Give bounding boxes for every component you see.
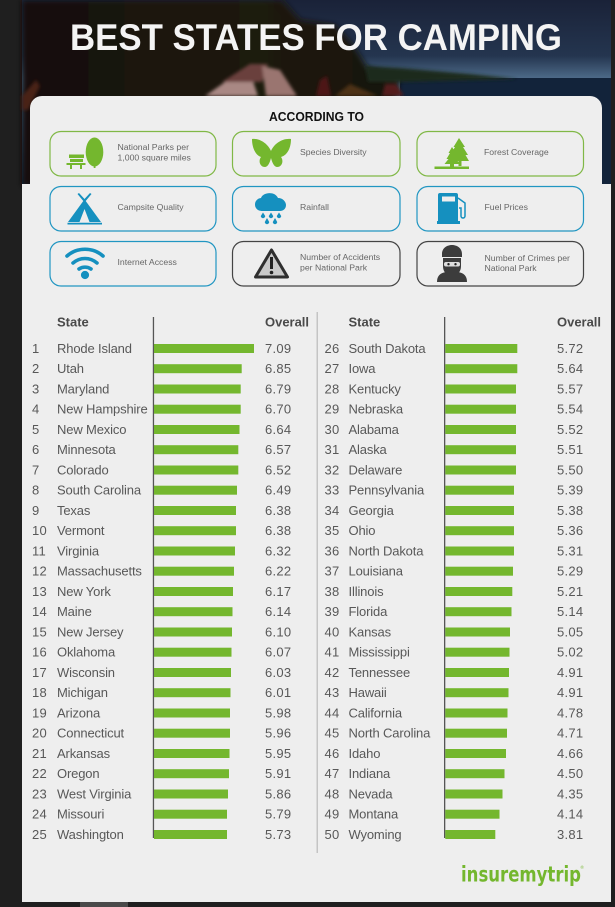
row 41: 5.02 [557, 645, 583, 660]
row 45: 4.71 [557, 726, 583, 741]
factor: accidents: Number of Accidents [300, 252, 381, 262]
row 26 [324, 341, 583, 356]
row 10: Vermont [57, 523, 105, 538]
row 44: 44 [324, 706, 339, 720]
logo: insuremytrip: ® [580, 864, 584, 870]
row 17: Wisconsin [57, 665, 115, 680]
row 48: 48 [324, 786, 339, 802]
row 23: 5.86 [265, 786, 291, 802]
ranking table: right column [324, 314, 601, 842]
row 4 [32, 402, 291, 417]
row 50: Wyoming [348, 827, 402, 842]
row 23: West Virginia [57, 786, 132, 802]
row 25 [32, 827, 291, 842]
row 2: Utah [57, 361, 84, 376]
row 15: 15 [32, 624, 47, 640]
column divider [316, 312, 318, 853]
row 47 [324, 766, 583, 781]
row 24: 24 [32, 807, 47, 822]
row 22: 22 [32, 766, 47, 781]
row 39 [324, 604, 583, 619]
row 22 [32, 766, 291, 781]
row 35: Ohio [348, 523, 375, 538]
icon: warning sign [256, 250, 288, 277]
row 18: Michigan [57, 685, 108, 700]
row 17 [32, 665, 291, 680]
row 49: Montana [348, 807, 399, 822]
factor: national parks: 1,000 square miles [118, 152, 192, 162]
row 8: South Carolina [57, 483, 142, 498]
factor: fuel prices [417, 186, 584, 231]
row 12 [32, 564, 291, 579]
row 49: 4.14 [557, 807, 583, 822]
row 33: 33 [324, 483, 339, 498]
axis line [444, 317, 445, 838]
icon: trees [434, 138, 469, 169]
header: overall: Overall [557, 314, 601, 330]
factor: national parks: National Parks per [118, 142, 189, 152]
row 43: 43 [324, 685, 339, 700]
row 28: 28 [324, 382, 339, 396]
row 25: Washington [57, 827, 124, 842]
header: state: State [348, 314, 380, 330]
row 3 [32, 382, 291, 396]
factor: species diversity: Species Diversity [300, 147, 367, 157]
row 44: California [348, 706, 403, 720]
row 40: 40 [324, 624, 339, 640]
row 28 [324, 382, 583, 396]
row 38: Illinois [348, 584, 384, 599]
row 32: Delaware [348, 462, 402, 478]
factor: rainfall: Rainfall [300, 202, 329, 212]
factor: species diversity [232, 132, 400, 176]
heading: according to: ACCORDING TO [269, 109, 364, 124]
row 17: 6.03 [265, 665, 291, 680]
row 13: 13 [32, 584, 47, 599]
row 7: 6.52 [265, 462, 291, 478]
row 35: 35 [324, 523, 339, 538]
row 6: 6 [32, 442, 39, 457]
row 8: 8 [32, 483, 39, 498]
factor: national parks [50, 132, 216, 176]
row 21: 5.95 [265, 746, 291, 761]
row 18 [32, 685, 291, 700]
factor: crimes [417, 242, 584, 286]
row 36: North Dakota [348, 544, 424, 558]
row 20: 5.96 [265, 726, 291, 741]
row 4: New Hampshire [57, 402, 148, 417]
row 8 [32, 483, 291, 498]
row 15: 6.10 [265, 624, 291, 640]
row 21: Arkansas [57, 746, 111, 761]
row 5: New Mexico [57, 422, 126, 437]
row 24: Missouri [57, 807, 104, 822]
row 14: 14 [32, 604, 47, 619]
row 43: 4.91 [557, 685, 583, 700]
ranking table: left column [32, 314, 309, 842]
row 49: 49 [324, 807, 339, 822]
row 30: 30 [324, 422, 339, 437]
row 33: 5.39 [557, 483, 583, 498]
row 37 [324, 564, 583, 579]
row 23: 23 [32, 786, 47, 802]
row 24: 5.79 [265, 807, 291, 822]
row 35: 5.36 [557, 523, 583, 538]
row 26: 5.72 [557, 341, 583, 356]
factor: forest coverage [417, 132, 584, 176]
row 31: Alaska [348, 442, 388, 457]
row 19: Arizona [57, 706, 101, 720]
title: BEST STATES FOR CAMPING [70, 17, 562, 58]
row 10 [32, 523, 291, 538]
icon: burglar [437, 245, 467, 282]
row 33: Pennsylvania [348, 483, 425, 498]
row 42: 4.91 [557, 665, 583, 680]
row 14 [32, 604, 291, 619]
row 18: 6.01 [265, 685, 291, 700]
row 34: 5.38 [557, 503, 583, 518]
row 46 [324, 746, 583, 761]
factor: crimes: Number of Crimes per [484, 253, 570, 263]
row 26: South Dakota [348, 341, 426, 356]
row 33 [324, 483, 583, 498]
logo: insuremytrip: insuremytrip [461, 862, 581, 886]
row 34: Georgia [348, 503, 395, 518]
row 27: Iowa [348, 361, 376, 376]
row 4: 4 [32, 402, 39, 417]
row 20: 20 [32, 726, 47, 741]
row 9: 9 [32, 503, 39, 518]
row 6 [32, 442, 291, 457]
icon: butterfly [252, 139, 291, 167]
row 11 [32, 544, 291, 558]
row 39: Florida [348, 604, 388, 619]
factor: fuel prices: Fuel Prices [484, 202, 529, 212]
row 5: 5 [32, 422, 39, 437]
row 9: 6.38 [265, 503, 291, 518]
row 41: Mississippi [348, 645, 410, 660]
row 34 [324, 503, 583, 518]
row 20 [32, 726, 291, 741]
row 12: 6.22 [265, 564, 291, 579]
row 11: 6.32 [265, 544, 291, 558]
icon: tent [68, 193, 102, 224]
row 30: 5.52 [557, 422, 583, 437]
row 28: Kentucky [348, 382, 401, 396]
row 50: 50 [324, 827, 339, 842]
row 1 [32, 341, 291, 356]
factor: forest coverage: Forest Coverage [484, 147, 549, 157]
row 30 [324, 422, 583, 437]
row 16: 16 [32, 645, 47, 660]
row 36 [324, 544, 583, 558]
factor: rainfall [232, 186, 400, 231]
row 27: 27 [324, 361, 339, 376]
row 45 [324, 726, 583, 741]
row 25: 5.73 [265, 827, 291, 842]
factor: campsite quality: Campsite Quality [118, 202, 184, 212]
row 41: 41 [324, 645, 339, 660]
row 21 [32, 746, 291, 761]
icon: wifi [67, 249, 103, 277]
row 29: 29 [324, 402, 339, 417]
row 31: 31 [324, 442, 339, 457]
row 32: 5.50 [557, 462, 583, 478]
row 28: 5.57 [557, 382, 583, 396]
row 29: Nebraska [348, 402, 404, 417]
row 22: Oregon [57, 766, 99, 781]
row 1: Rhode Island [57, 341, 132, 356]
row 11: 11 [32, 544, 46, 558]
row 37: 37 [324, 564, 339, 579]
row 26: 26 [324, 341, 339, 356]
header photo: campsite at night [22, 0, 611, 186]
row 27 [324, 361, 583, 376]
row 37: 5.29 [557, 564, 583, 579]
row 17: 17 [32, 665, 47, 680]
row 29: 5.54 [557, 402, 583, 417]
row 6: 6.57 [265, 442, 291, 457]
row 41 [324, 645, 583, 660]
row 42: Tennessee [348, 665, 410, 680]
row 11: Virginia [57, 544, 100, 558]
row 3: 3 [32, 382, 39, 396]
row 12: Massachusetts [57, 564, 142, 579]
row 34: 34 [324, 503, 339, 518]
icon: rain cloud [255, 193, 286, 224]
row 22: 5.91 [265, 766, 291, 781]
row 7: 7 [32, 462, 39, 478]
row 49 [324, 807, 583, 822]
row 1: 7.09 [265, 341, 291, 356]
row 13: New York [57, 584, 111, 599]
row 7 [32, 462, 291, 478]
row 19 [32, 706, 291, 720]
row 44 [324, 706, 583, 720]
row 32: 32 [324, 462, 339, 478]
row 10: 10 [32, 523, 47, 538]
row 44: 4.78 [557, 706, 583, 720]
row 37: Louisiana [348, 564, 404, 579]
row 38: 38 [324, 584, 339, 599]
row 16: 6.07 [265, 645, 291, 660]
row 36: 5.31 [557, 544, 583, 558]
row 21: 21 [32, 746, 47, 761]
row 16: Oklahoma [57, 645, 116, 660]
factor: accidents [232, 242, 400, 286]
row 16 [32, 645, 291, 660]
row 40 [324, 624, 583, 640]
row 6: Minnesota [57, 442, 117, 457]
icon: bench and tree [66, 138, 103, 169]
row 12: 12 [32, 564, 47, 579]
row 42 [324, 665, 583, 680]
row 13: 6.17 [265, 584, 291, 599]
row 45: 45 [324, 726, 339, 741]
row 46: Idaho [348, 746, 380, 761]
row 48 [324, 786, 583, 802]
row 31: 5.51 [557, 442, 583, 457]
row 9 [32, 503, 291, 518]
row 39: 39 [324, 604, 339, 619]
row 1: 1 [32, 341, 39, 356]
row 14: 6.14 [265, 604, 291, 619]
row 42: 42 [324, 665, 339, 680]
row 7: Colorado [57, 462, 109, 478]
row 31 [324, 442, 583, 457]
row 32 [324, 462, 583, 478]
factor: accidents: per National Park [300, 262, 368, 272]
row 46: 46 [324, 746, 339, 761]
row 43 [324, 685, 583, 700]
row 47: Indiana [348, 766, 391, 781]
row 24 [32, 807, 291, 822]
row 25: 25 [32, 827, 47, 842]
factor: campsite quality [50, 186, 216, 231]
header: state: State [57, 314, 89, 330]
row 9: Texas [57, 503, 91, 518]
row 2: 6.85 [265, 361, 291, 376]
row 14: Maine [57, 604, 92, 619]
row 35 [324, 523, 583, 538]
row 47: 4.50 [557, 766, 583, 781]
row 47: 47 [324, 766, 339, 781]
row 8: 6.49 [265, 483, 291, 498]
row 48: 4.35 [557, 786, 583, 802]
row 50: 3.81 [557, 827, 583, 842]
row 5: 6.64 [265, 422, 291, 437]
factor: internet access [50, 242, 216, 286]
icon: fuel pump [437, 193, 460, 224]
row 2 [32, 361, 291, 376]
row 43: Hawaii [348, 685, 387, 700]
row 27: 5.64 [557, 361, 583, 376]
row 30: Alabama [348, 422, 400, 437]
row 20: Connecticut [57, 726, 125, 741]
row 19: 5.98 [265, 706, 291, 720]
axis line [153, 317, 154, 838]
factor: crimes: National Park [484, 263, 537, 273]
row 19: 19 [32, 706, 47, 720]
row 3: Maryland [57, 382, 109, 396]
row 39: 5.14 [557, 604, 583, 619]
row 15: New Jersey [57, 624, 124, 640]
row 3: 6.79 [265, 382, 291, 396]
row 15 [32, 624, 291, 640]
scrollbar remnant [80, 902, 128, 907]
row 38 [324, 584, 583, 599]
row 50 [324, 827, 583, 842]
row 38: 5.21 [557, 584, 583, 599]
row 46: 4.66 [557, 746, 583, 761]
row 2: 2 [32, 361, 39, 376]
row 29 [324, 402, 583, 417]
row 23 [32, 786, 291, 802]
row 4: 6.70 [265, 402, 291, 417]
row 48: Nevada [348, 786, 393, 802]
row 36: 36 [324, 544, 339, 558]
row 40: Kansas [348, 624, 392, 640]
factor: internet access: Internet Access [118, 257, 178, 267]
header: overall: Overall [265, 314, 309, 330]
row 10: 6.38 [265, 523, 291, 538]
row 13 [32, 584, 291, 599]
row 18: 18 [32, 685, 47, 700]
row 45: North Carolina [348, 726, 431, 741]
row 5 [32, 422, 291, 437]
row 40: 5.05 [557, 624, 583, 640]
